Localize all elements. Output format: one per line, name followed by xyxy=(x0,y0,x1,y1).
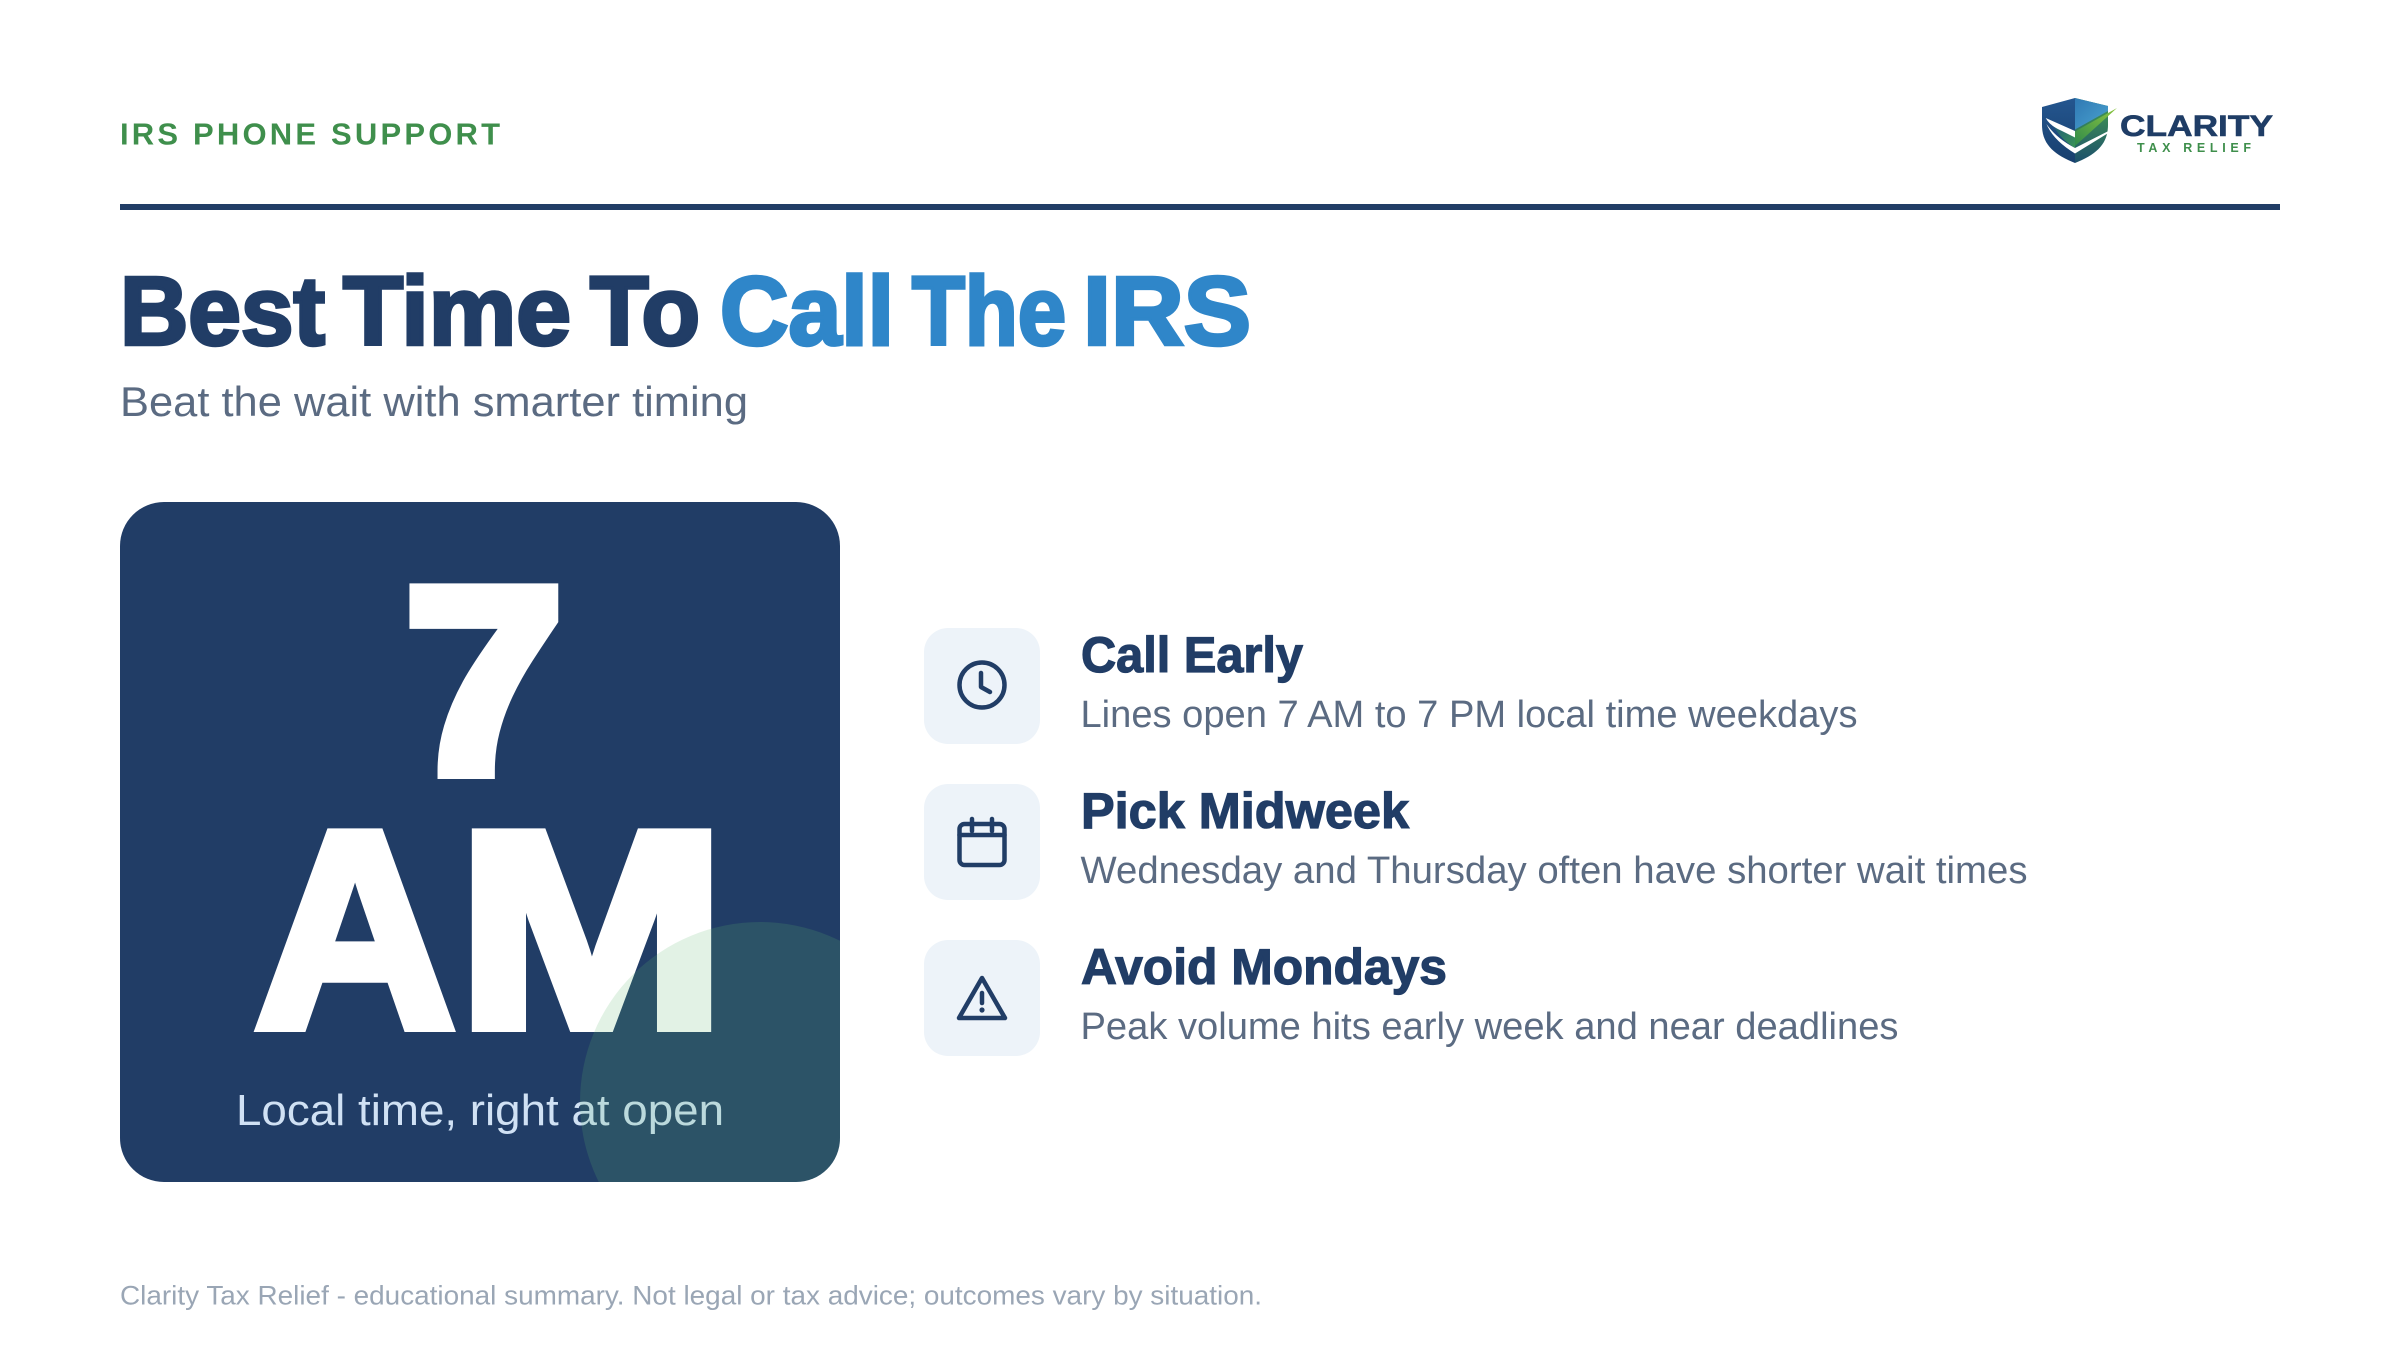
header rule xyxy=(120,204,2280,210)
list item: Call Early xyxy=(924,627,1858,744)
icon tile: clock xyxy=(924,628,1040,744)
list item: Pick Midweek xyxy=(924,783,2028,900)
icon: shield xyxy=(2042,98,2117,163)
logo wordmark: CLARITY xyxy=(2120,110,2273,143)
icon tile: warning triangle xyxy=(924,940,1040,1056)
heading: Call Early xyxy=(1081,627,1303,683)
description: Peak volume hits early week and near deadlines xyxy=(1080,1006,1898,1048)
footer disclaimer: Clarity Tax Relief - educational summary. Not legal or tax advice; outcomes vary by situation. xyxy=(120,1280,1262,1310)
title: The xyxy=(912,256,1066,366)
heading: Avoid Mondays xyxy=(1081,939,1447,995)
title: Call xyxy=(720,256,894,366)
logo tagline: TAX RELIEF xyxy=(2137,141,2251,155)
logo: Clarity Tax Relief xyxy=(2042,98,2273,163)
list item: Avoid Mondays xyxy=(924,939,1898,1056)
icon tile: calendar xyxy=(924,784,1040,900)
title: Time xyxy=(343,256,571,366)
title xyxy=(120,256,1251,366)
heading: Pick Midweek xyxy=(1081,783,1409,839)
title: Best xyxy=(120,256,325,366)
subtitle: Beat the wait with smarter timing xyxy=(120,378,748,425)
panel: 7 AM hero card xyxy=(120,502,840,1182)
caption: Local time, right at open xyxy=(236,1086,724,1135)
big label AM: A xyxy=(254,774,456,1086)
description: Lines open 7 AM to 7 PM local time weekdays xyxy=(1080,694,1858,736)
big number 7: 7 xyxy=(406,536,562,827)
big label AM xyxy=(254,774,726,1086)
big label AM: M xyxy=(456,774,726,1086)
decorative circle xyxy=(580,922,840,1182)
description: Wednesday and Thursday often have shorter wait times xyxy=(1080,850,2028,892)
title: To xyxy=(590,256,700,366)
eyebrow: IRS phone support: IRS PHONE SUPPORT xyxy=(120,116,500,152)
title: IRS xyxy=(1083,256,1251,366)
